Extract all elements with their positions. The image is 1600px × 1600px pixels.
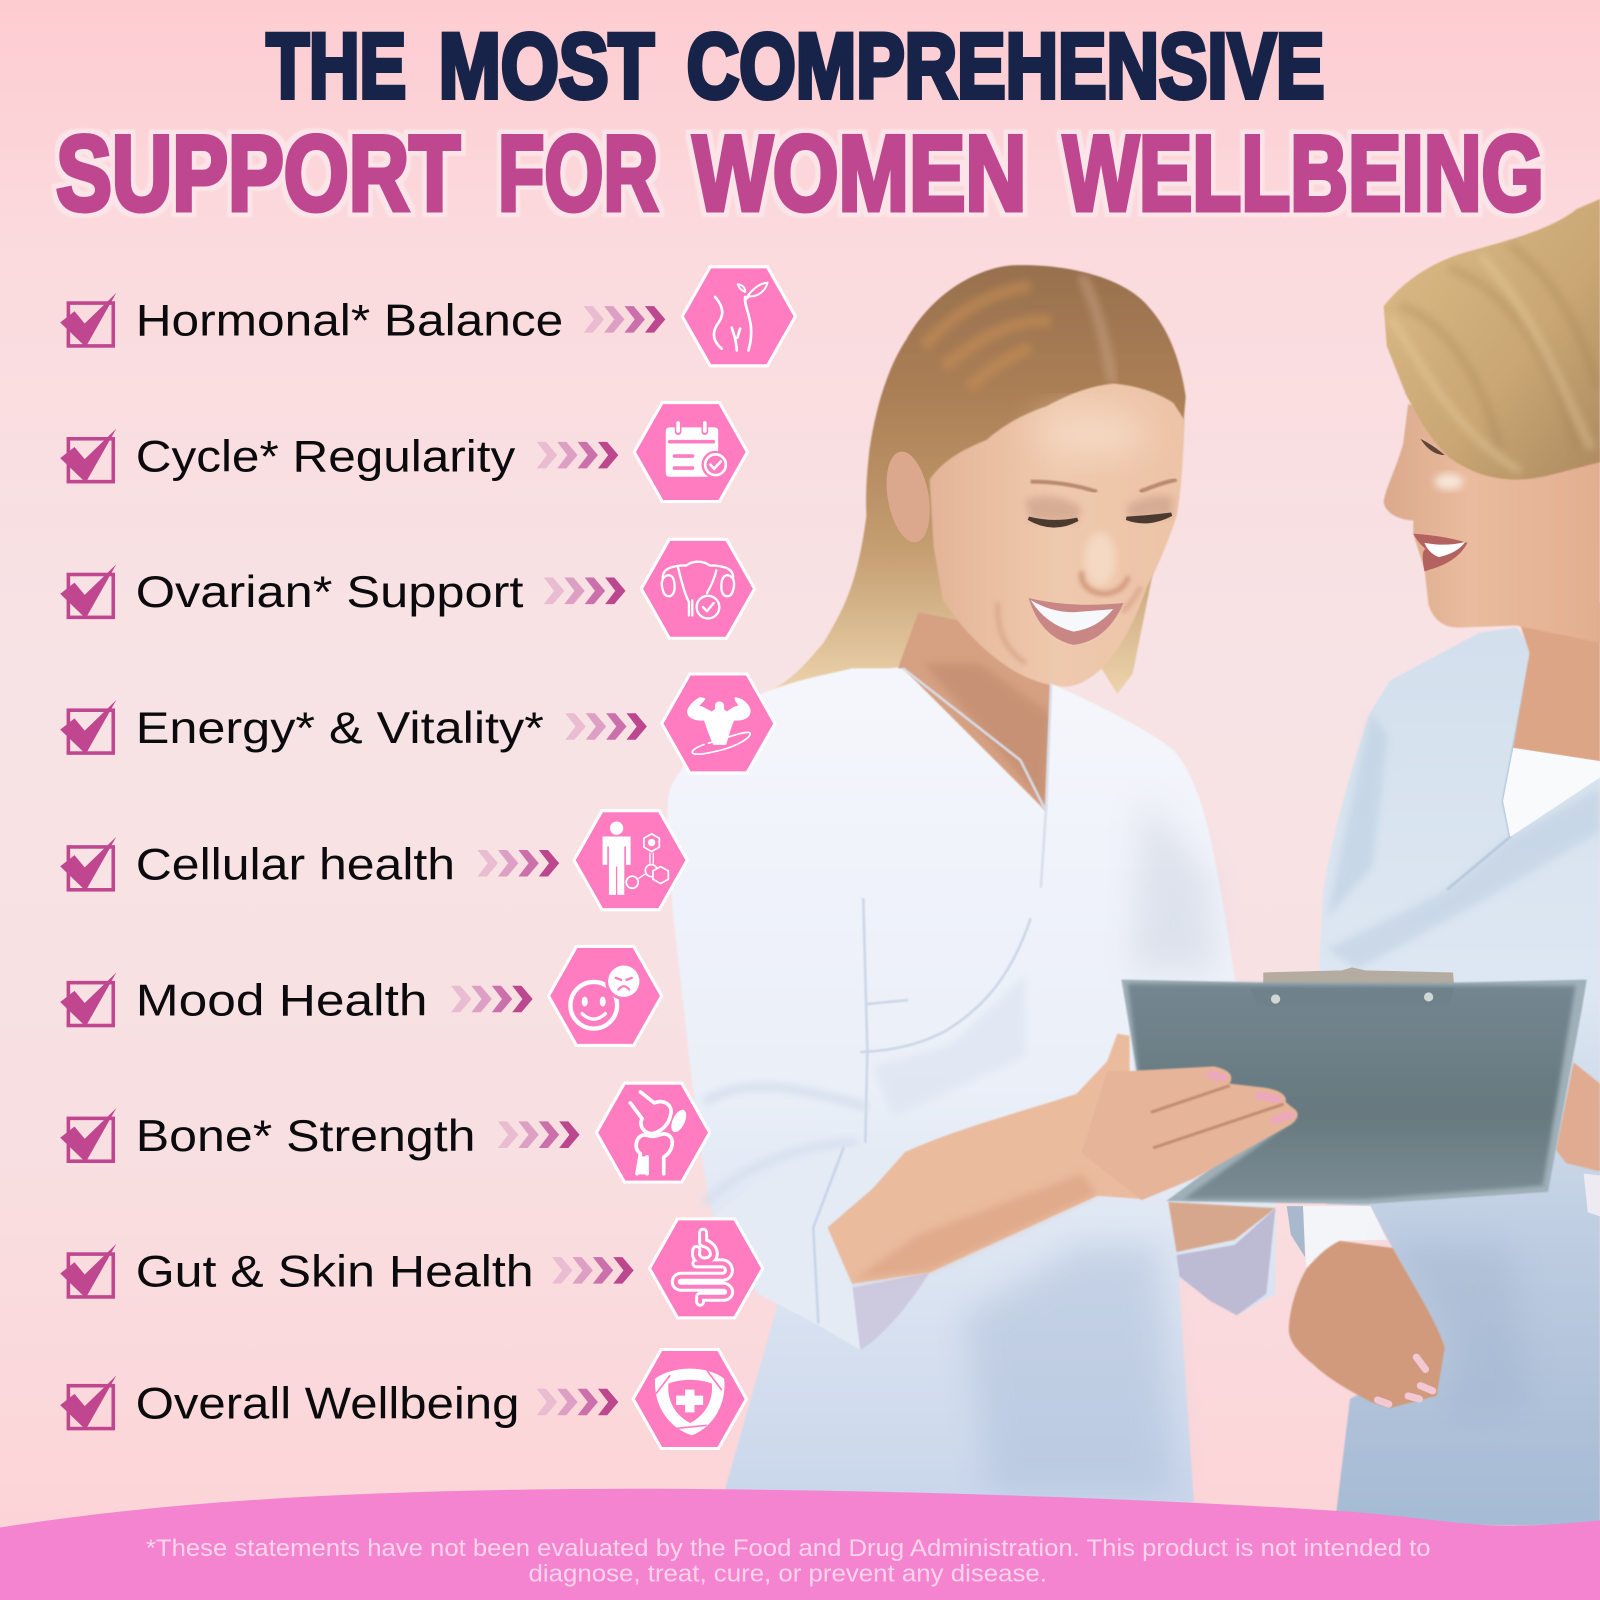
cheek highlight: right woman <box>1435 473 1463 490</box>
mouth: left woman <box>1029 598 1123 645</box>
arrows <box>584 306 665 333</box>
nose shadow: left woman <box>1081 571 1129 594</box>
icon: smiley faces <box>548 946 662 1045</box>
hand: right woman <box>1289 1241 1445 1408</box>
clipboard rivet plate <box>1250 988 1454 1006</box>
title line 1: MOST <box>439 15 654 117</box>
arrows <box>552 1257 634 1284</box>
icon: digestive tract <box>649 1219 763 1318</box>
eye socket shade: left woman <box>1026 496 1173 522</box>
label: Bone* Strength <box>136 1110 476 1161</box>
hair part: left woman <box>1082 276 1112 383</box>
under arm: left woman <box>1168 1202 1276 1252</box>
sleeve fold: left woman <box>704 1087 867 1204</box>
hair: right woman <box>1384 199 1600 480</box>
coat right shade: left woman <box>1133 796 1214 969</box>
checkbox <box>60 429 116 483</box>
neck shadow: left woman <box>923 663 1051 806</box>
clipboard rim <box>1121 980 1587 1204</box>
nails: right woman <box>1378 1357 1433 1404</box>
title line 2: SUPPORT <box>56 113 460 233</box>
label: Energy* & Vitality* <box>136 702 544 753</box>
title line 2: WOMEN <box>693 113 1027 233</box>
label: Overall Wellbeing <box>136 1377 519 1428</box>
undershirt: right woman <box>1503 748 1600 837</box>
collar seam: left woman <box>903 668 1051 888</box>
row: Mood Health <box>60 946 662 1045</box>
checkbox <box>60 293 116 347</box>
hair highlights: right woman <box>1390 255 1592 471</box>
lapel edge: right woman <box>1447 663 1530 890</box>
cheek fold: left woman <box>998 587 1141 663</box>
clipboard board <box>1128 984 1576 1199</box>
arrows <box>537 442 618 468</box>
row: Energy and Vitality <box>60 674 775 773</box>
fingernails <box>1210 1074 1291 1120</box>
arrows <box>565 713 647 740</box>
eyes: left woman <box>1029 514 1171 526</box>
checkbox <box>60 564 116 618</box>
eye: right woman <box>1420 439 1445 455</box>
row: Overall Wellbeing <box>60 1349 746 1448</box>
forehead highlight: left woman <box>1036 411 1148 456</box>
face: left woman <box>930 384 1185 687</box>
sleeve cuff: right woman <box>1303 1206 1387 1267</box>
arrows <box>537 1389 618 1415</box>
coat shade by hand: right woman <box>1388 1240 1531 1418</box>
label: Mood Health <box>136 974 428 1025</box>
checkbox <box>60 1108 116 1162</box>
coat fold: left woman <box>860 898 1031 1143</box>
far arm: right woman <box>1556 1062 1600 1171</box>
fingers <box>1082 1066 1298 1200</box>
neck: right woman <box>1513 602 1600 761</box>
title line 1: COMPREHENSIVE <box>687 15 1324 117</box>
label: Cycle* Regularity <box>136 430 516 481</box>
disclaimer text: *These statements have not been evaluated by the Food and Drug Administration. This product is not intended to <box>146 1535 1431 1562</box>
photo: woman on the right <box>1287 199 1600 1526</box>
clipboard rivets <box>1276 997 1429 999</box>
cuff lining: left woman <box>852 1272 930 1350</box>
row: Gut and Skin Health <box>60 1219 763 1318</box>
teeth: left woman <box>1031 600 1113 632</box>
label: Ovarian* Support <box>136 566 524 617</box>
pocket shade: left woman <box>872 974 1026 1117</box>
back flap: right woman <box>1287 1206 1305 1257</box>
coat shadow fold: right woman <box>1327 788 1600 969</box>
footer band <box>0 1489 1600 1600</box>
hair: left woman <box>767 265 1186 694</box>
coat: left woman <box>667 668 1276 1502</box>
lapel shade: right woman <box>1327 712 1388 918</box>
checkbox <box>60 837 116 891</box>
checkbox <box>60 1244 116 1298</box>
row: Cellular health <box>60 811 687 910</box>
checkbox <box>60 700 116 754</box>
row: Ovarian Support <box>60 539 755 638</box>
photo: woman on the left <box>667 265 1298 1502</box>
finger creases <box>1151 1086 1284 1148</box>
disclaimer text: diagnose, treat, cure, or prevent any disease. <box>529 1561 1047 1588</box>
nose highlight: left woman <box>1085 533 1115 586</box>
far cuff lining: left woman <box>1177 1208 1276 1315</box>
lips: right woman <box>1413 534 1467 571</box>
cuff seam: left woman <box>813 1147 844 1323</box>
row: Cycle Regularity <box>60 403 747 502</box>
arrows <box>498 1121 580 1148</box>
brows: left woman <box>1031 480 1177 492</box>
ear: left woman <box>880 448 936 546</box>
title line 1 <box>266 15 1324 117</box>
icon: knee joint <box>596 1083 710 1182</box>
cuff: left woman <box>713 1147 905 1350</box>
forearm: left woman <box>828 1034 1298 1284</box>
coat: right woman <box>1318 628 1600 1526</box>
clipboard clip <box>1263 967 1454 986</box>
label: Cellular health <box>136 839 455 890</box>
label: Hormonal* Balance <box>136 295 563 346</box>
disclaimer text <box>146 1535 1431 1588</box>
icon: human and molecules <box>574 811 687 910</box>
icon: calendar <box>634 403 747 502</box>
far cuff: right woman <box>1584 1173 1600 1216</box>
title line 2 <box>56 113 1544 233</box>
face: right woman <box>1384 404 1600 643</box>
row: Bone Strength <box>60 1083 710 1182</box>
row: Hormonal Balance <box>60 267 795 366</box>
icon: body with leaf <box>682 267 795 366</box>
title line 1: THE <box>266 15 406 117</box>
icon: shield with cross <box>633 1349 746 1448</box>
coat lower shade: left woman <box>964 1245 1173 1495</box>
icon: uterus <box>641 539 755 638</box>
teeth: right woman <box>1424 542 1465 557</box>
checkbox <box>60 972 116 1027</box>
neck: left woman <box>898 612 1053 816</box>
hair highlights: left woman <box>923 286 1051 388</box>
hair strands: right woman <box>1400 245 1597 449</box>
forearm shade: left woman <box>852 1173 1097 1281</box>
checkbox <box>60 1376 116 1430</box>
arrows <box>451 986 533 1012</box>
label: Gut & Skin Health <box>136 1246 534 1297</box>
clipboard <box>1082 967 1587 1204</box>
arrows <box>544 578 626 604</box>
arrows <box>478 850 559 877</box>
icon: strong figure <box>662 674 775 773</box>
title line 2: FOR <box>498 113 658 233</box>
